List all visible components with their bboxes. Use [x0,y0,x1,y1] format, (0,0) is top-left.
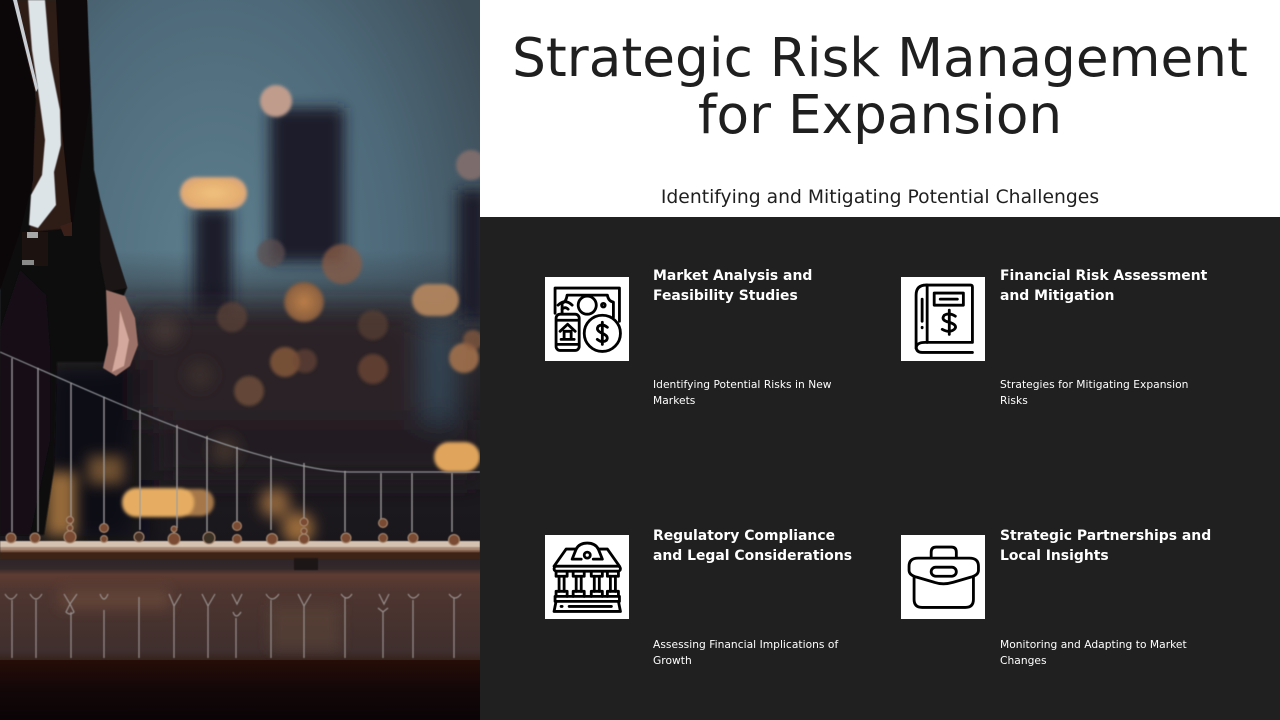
blurred towers [194,108,488,320]
bridge main cable [0,352,480,472]
text: financial risk: Risks [1000,394,1028,407]
subtitle: Identifying and Mitigating Potential Challenges [661,187,1099,208]
text: market analysis: Identifying Potential Risks in New [653,378,832,391]
heading: market analysis: Market Analysis and [653,268,812,284]
text: strategic partnerships [1000,638,1187,667]
icon: briefcase [900,534,985,619]
text: regulatory compliance [653,638,838,667]
heading: regulatory compliance: Regulatory Compliance [653,528,835,544]
heading: regulatory compliance: and Legal Considerations [653,548,852,564]
panel: risk management topics [480,217,1280,720]
table surface and reflections [0,553,480,662]
hand [103,290,138,376]
bridge deck [0,541,480,570]
suit jacket [0,0,138,535]
sky [0,0,480,720]
heading: strategic partnerships: Strategic Partnerships and [1000,528,1211,544]
table base [0,660,480,720]
heading: regulatory compliance [653,528,852,564]
belt [22,232,48,266]
bokeh lights [180,85,486,406]
text: regulatory compliance: Assessing Financial Implications of [653,638,838,651]
text: market analysis: Markets [653,394,695,407]
title: Strategic Risk Management [512,26,1248,88]
icon: finance book with dollar sign [900,276,985,361]
heading: strategic partnerships: Local Insights [1000,548,1109,564]
heading: market analysis: Feasibility Studies [653,288,798,304]
text: financial risk [1000,378,1188,407]
title [512,26,1248,146]
heading: strategic partnerships [1000,528,1211,564]
text: regulatory compliance: Growth [653,654,692,667]
trousers [0,270,50,535]
text: financial risk: Strategies for Mitigating Expansion [1000,378,1188,391]
heading: financial risk: Financial Risk Assessment [1000,268,1207,284]
text: strategic partnerships: Monitoring and Adapting to Market [1000,638,1187,651]
heading: market analysis [653,268,812,304]
text: strategic partnerships: Changes [1000,654,1047,667]
heading: financial risk: and Mitigation [1000,288,1114,304]
shirt interior [14,0,72,232]
text: market analysis [653,378,832,407]
icon: money, phone and dollar coin [544,276,629,361]
sleeve [100,200,127,292]
heading: financial risk [1000,268,1207,304]
bridge hanger cables [12,358,452,532]
title: for Expansion [698,84,1062,146]
shirt [28,0,61,228]
photo: businessman and bridge over blurred city [0,0,480,720]
icon: classical bank building [544,534,629,619]
bridge beads [6,516,460,546]
bridge reflection [5,594,461,658]
